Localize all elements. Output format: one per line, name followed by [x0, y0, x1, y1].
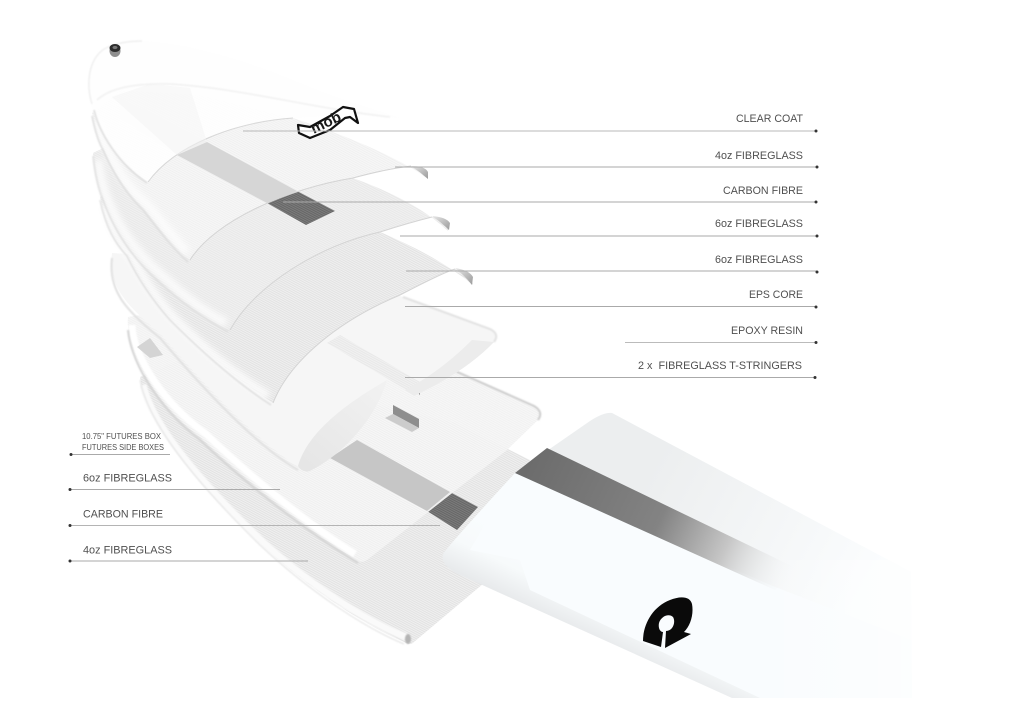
tail of finished board: [443, 413, 915, 700]
label: 4oz fibreglass: 4oz FIBREGLASS: [715, 150, 803, 162]
upper light carbon strip: [120, 98, 297, 203]
label: futures boxes: 10.75" FUTURES BOX: [82, 432, 162, 441]
label: 6oz fibreglass: [400, 218, 818, 238]
tail curl of lowest sheet: [455, 268, 473, 285]
icon: leash plug: [110, 44, 120, 57]
icon: mob logo: [298, 107, 358, 138]
label: EPS core: EPS CORE: [749, 289, 803, 301]
label: clear coat: [243, 113, 818, 132]
label: 6oz fibreglass second: 6oz FIBREGLASS: [715, 254, 803, 266]
label: left carbon fibre: [68, 508, 440, 527]
label: 6oz fibreglass second: [406, 254, 818, 274]
label: left 4oz fibreglass: 4oz FIBREGLASS: [83, 544, 172, 556]
label: carbon fibre: CARBON FIBRE: [723, 185, 803, 197]
lower dark carbon patch: [427, 492, 478, 530]
tail curl of 4oz sheet: [411, 166, 428, 179]
label: left 6oz fibreglass: 6oz FIBREGLASS: [83, 472, 172, 484]
fibreglass T-stringer: [385, 385, 420, 432]
lower 6oz fibreglass sheet: [128, 310, 540, 563]
tail carbon strip: [515, 448, 800, 590]
label: epoxy resin: [625, 325, 818, 344]
label: left 6oz fibreglass: [68, 472, 280, 491]
label: T-stringers: [405, 360, 816, 379]
label: futures boxes: FUTURES SIDE BOXES: [82, 443, 164, 452]
label: left 4oz fibreglass: [68, 544, 308, 562]
icon: mob logo: mob: [308, 108, 344, 138]
lower 4oz fibreglass sheet: [140, 360, 530, 644]
label: left carbon fibre: CARBON FIBRE: [83, 508, 163, 520]
6oz fibreglass sheet, middle: [93, 130, 450, 332]
4oz fibreglass sheet: [92, 90, 428, 262]
label: 4oz fibreglass: [395, 150, 818, 168]
label: epoxy resin: EPOXY RESIN: [731, 325, 803, 337]
lower carbon fibre strip: [137, 338, 450, 511]
label: 6oz fibreglass: 6oz FIBREGLASS: [715, 218, 803, 230]
dark carbon patch: [267, 191, 335, 225]
label: futures boxes: [70, 432, 170, 456]
tail curl of middle sheet: [432, 216, 450, 230]
label: EPS core: [405, 289, 818, 308]
clear coat sheet: [88, 41, 400, 183]
label: T-stringers: 2 x FIBREGLASS T-STRINGERS: [638, 360, 802, 372]
icon: Q swirl logo: [643, 597, 693, 648]
6oz fibreglass sheet, lowest: [100, 170, 473, 405]
label: carbon fibre: [283, 185, 818, 204]
EPS core: [111, 253, 496, 471]
label: clear coat: CLEAR COAT: [736, 113, 803, 125]
